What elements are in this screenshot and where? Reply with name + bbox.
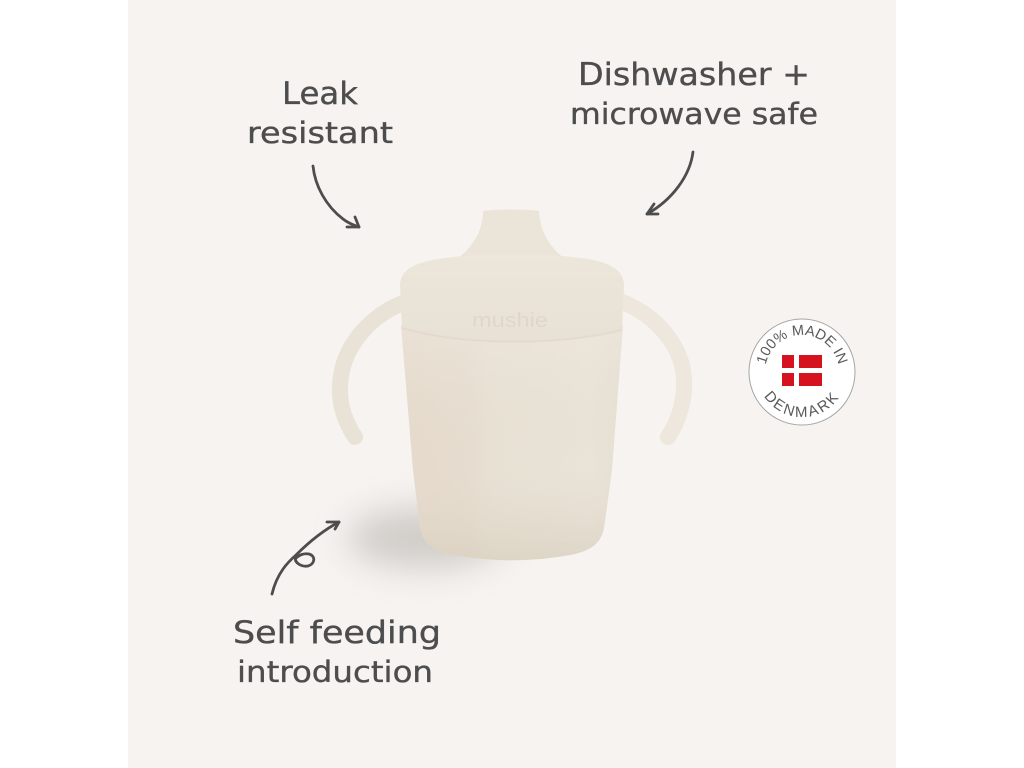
text: Self feeding introduction: Self feeding	[233, 615, 441, 651]
text: Self feeding introduction: introduction	[237, 655, 433, 689]
badge text top: 100% MADE IN	[757, 324, 848, 364]
lid brand: mushie	[472, 310, 548, 332]
badge: 100% made in Denmark	[748, 318, 856, 426]
cup product	[340, 210, 684, 568]
arrow: self feeding	[272, 522, 339, 594]
badge circle	[749, 319, 855, 425]
left handle	[340, 303, 403, 437]
panel: background	[128, 0, 896, 768]
cup shadow	[347, 508, 503, 568]
arrow: leak resistant	[313, 166, 359, 227]
right handle	[622, 302, 684, 437]
cup body	[401, 325, 623, 560]
text: Dishwasher + microwave safe: microwave safe	[570, 97, 818, 131]
text: Leak resistant	[247, 76, 393, 150]
badge text bottom: DENMARK	[764, 390, 839, 417]
spout	[456, 210, 566, 260]
arrow: dishwasher	[647, 152, 693, 214]
cup body shading	[401, 325, 623, 560]
text: Dishwasher + microwave safe: Dishwasher +	[578, 57, 810, 93]
text: Self feeding introduction	[233, 615, 441, 689]
text: Dishwasher + microwave safe	[570, 57, 818, 131]
Danish flag	[782, 355, 822, 386]
lid seam	[402, 328, 622, 342]
lid	[400, 254, 624, 342]
text: Leak resistant: resistant	[247, 116, 393, 150]
text: Leak resistant: Leak	[282, 76, 358, 112]
